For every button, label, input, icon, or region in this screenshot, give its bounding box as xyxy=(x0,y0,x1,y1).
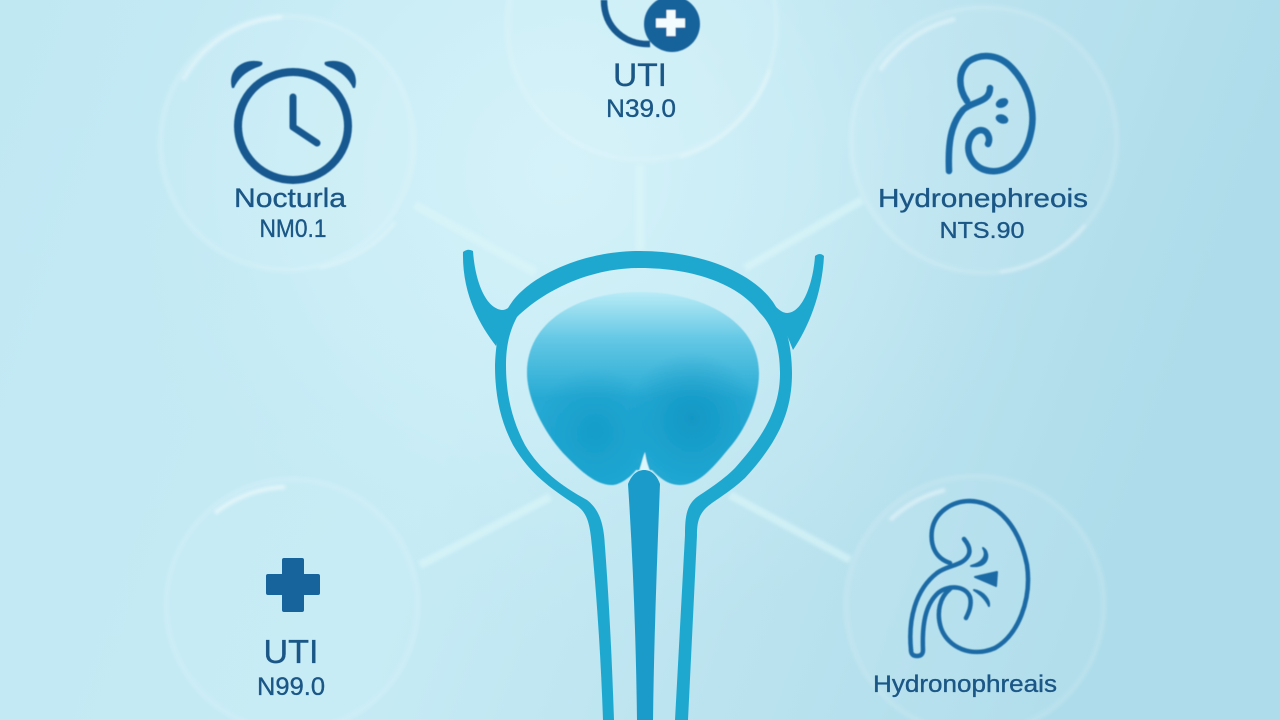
icon: alarm clock xyxy=(231,61,356,180)
label: Hydronephrosis: Hydronephreois xyxy=(878,183,1088,213)
icon: kidney xyxy=(949,56,1032,171)
panel: nocturia xyxy=(160,16,414,270)
panel: hydronephrosis top xyxy=(851,7,1117,273)
icon: kidney with ureter xyxy=(910,501,1028,656)
label: Hydronephrosis: Hydronophreais xyxy=(873,671,1057,698)
label: UTI: UTI xyxy=(264,633,318,670)
code: UTI: N39.0 xyxy=(606,95,676,123)
code: Nocturia: NM0.1 xyxy=(260,215,326,243)
icon: ring with plus badge xyxy=(604,0,700,52)
icon: medical cross xyxy=(266,558,320,612)
panel: hydronephrosis bottom xyxy=(846,476,1104,720)
panel: UTI top xyxy=(507,0,777,160)
code: Hydronephrosis: NTS.90 xyxy=(940,217,1024,243)
label: UTI: UTI xyxy=(613,57,667,93)
panel: UTI bottom xyxy=(166,479,418,720)
left ureter xyxy=(463,250,520,346)
urethra xyxy=(628,470,660,720)
bladder wall xyxy=(495,251,792,720)
bladder diagram xyxy=(463,250,824,720)
label: Nocturia: Nocturla xyxy=(234,183,347,213)
bladder body xyxy=(527,292,759,485)
code: UTI: N99.0 xyxy=(257,673,325,701)
right ureter xyxy=(770,254,824,350)
connector rays xyxy=(415,165,862,565)
